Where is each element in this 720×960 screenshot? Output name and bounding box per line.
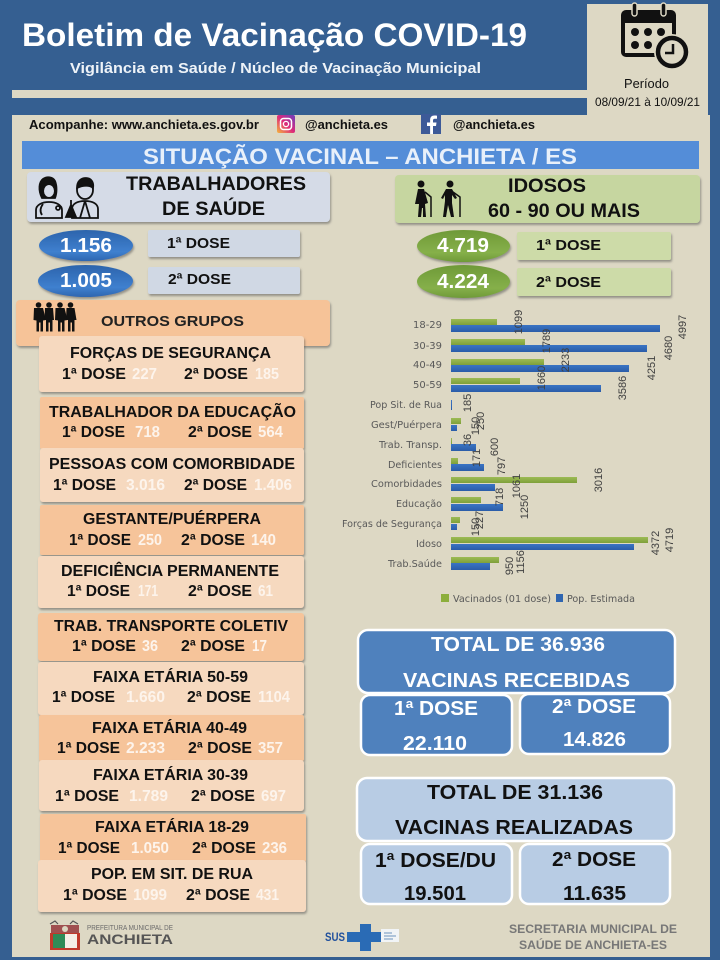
administered second dose: 2ª DOSE (552, 849, 636, 871)
data labels: 3586 (617, 376, 629, 400)
data labels: 1061 (511, 474, 523, 498)
card: comorbidade: PESSOAS COM COMORBIDADE (49, 456, 295, 473)
received second dose (520, 694, 670, 754)
data labels: 3016 (593, 468, 605, 492)
card: forças de segurança: 1ª DOSE (62, 366, 126, 383)
panel: vaccines received: TOTAL DE 36.936 (431, 634, 605, 656)
card: gestante: 140 (251, 532, 276, 549)
icon: instagram (277, 115, 295, 133)
footer: health department (509, 922, 677, 952)
card: comorbidade (40, 448, 304, 502)
data labels: 1156 (515, 550, 527, 574)
card: forças de segurança: 185 (255, 366, 279, 383)
administered first dose: 1ª DOSE/DU (375, 850, 496, 872)
card: comorbidade: 1ª DOSE (53, 477, 116, 494)
elderly second dose: 2ª DOSE (536, 274, 601, 291)
panel: vaccines administered (357, 778, 674, 905)
data labels: 4680 (663, 336, 675, 360)
data labels: 150 (470, 518, 482, 536)
card: gestante: 2ª DOSE (181, 532, 245, 549)
card: faixa 18-29 (40, 814, 306, 862)
data labels: 2233 (560, 348, 572, 372)
card: deficiência (38, 556, 304, 608)
card: deficiência: 2ª DOSE (188, 583, 252, 600)
period dates: 08/09/21 à 10/09/21 (595, 95, 700, 109)
data labels: 1099 (513, 310, 525, 334)
section heading bar: SITUAÇÃO VACINAL – ANCHIETA / ES (143, 144, 577, 169)
data labels: 600 (489, 438, 501, 456)
card: forças de segurança: 227 (132, 366, 157, 383)
card: deficiência: 61 (258, 583, 273, 600)
follow line (29, 114, 535, 134)
elderly first dose (417, 230, 671, 262)
logo: prefeitura de anchieta: ANCHIETA (87, 931, 173, 947)
category labels: Idoso (416, 539, 442, 550)
card: trabalhador da educação: 1ª DOSE (62, 424, 125, 441)
card: população em situação de rua: 431 (256, 887, 279, 904)
period label: Período (624, 76, 669, 91)
health workers second dose: 2ª DOSE (168, 271, 231, 288)
icon: elderly people (415, 180, 460, 217)
administered first dose: 19.501 (404, 883, 466, 905)
logo: SUS (325, 924, 399, 951)
data labels: 797 (496, 457, 508, 475)
received second dose: 14.826 (563, 729, 626, 751)
category labels: Comorbidades (371, 479, 442, 490)
panel: vaccines administered: VACINAS REALIZADAS (395, 817, 633, 839)
category labels: Pop Sit. de Rua (370, 400, 442, 411)
card: deficiência: 171 (138, 583, 158, 600)
panel: vaccines received: VACINAS RECEBIDAS (403, 670, 630, 692)
follow line: Acompanhe: www.anchieta.es.gov.br (29, 117, 259, 132)
title: Boletim de Vacinação COVID-19 (22, 17, 527, 53)
legend (441, 594, 635, 605)
bar chart: vaccinated vs estimated population (342, 310, 689, 605)
card: transporte coletivo (38, 613, 304, 661)
card: faixa 40-49: 357 (258, 740, 283, 757)
icon: group of people (34, 302, 76, 332)
category labels (342, 320, 442, 570)
card: comorbidade: 1.406 (254, 477, 292, 494)
follow line: @anchieta.es (453, 117, 535, 132)
panel: other groups (16, 300, 330, 346)
card: forças de segurança: FORÇAS DE SEGURANÇA (70, 345, 271, 362)
panel: vaccines administered: TOTAL DE 31.136 (427, 782, 603, 804)
card: faixa 50-59: 1104 (258, 689, 290, 706)
card: comorbidade: 2ª DOSE (184, 477, 247, 494)
card: população em situação de rua: 1099 (133, 887, 167, 904)
footer: health department: SECRETARIA MUNICIPAL DE (509, 922, 677, 936)
icon: facebook (421, 114, 441, 134)
card: população em situação de rua: 1ª DOSE (63, 887, 127, 904)
health workers first dose: 1ª DOSE (167, 235, 230, 252)
elderly first dose: 1ª DOSE (536, 237, 601, 254)
data labels: 1789 (541, 329, 553, 353)
health workers first dose: 1.156 (60, 235, 112, 257)
card: faixa 50-59: 1.660 (126, 689, 165, 706)
card: transporte coletivo: 1ª DOSE (72, 638, 136, 655)
card: faixa 50-59 (38, 662, 304, 715)
card: faixa 18-29: 2ª DOSE (192, 840, 256, 857)
legend: Pop. Estimada (567, 594, 635, 605)
card: trabalhador da educação: TRABALHADOR DA EDUCAÇÃO (49, 401, 296, 421)
health workers first dose (39, 230, 300, 261)
card: trabalhador da educação: 564 (258, 424, 283, 441)
health workers second dose: 1.005 (60, 270, 112, 292)
category labels: Deficientes (388, 460, 442, 471)
card: faixa 40-49: FAIXA ETÁRIA 40-49 (92, 718, 247, 737)
card: faixa 40-49 (39, 715, 304, 761)
card: forças de segurança: 2ª DOSE (184, 366, 248, 383)
health workers second dose (38, 265, 300, 297)
category labels: 18-29 (413, 320, 442, 331)
icon: calendar with clock (621, 3, 690, 70)
card: transporte coletivo: TRAB. TRANSPORTE COLETIV (54, 618, 288, 635)
card: faixa 40-49: 2ª DOSE (188, 740, 252, 757)
bars (451, 319, 660, 570)
header stripe (12, 90, 588, 98)
card: faixa 50-59: 1ª DOSE (52, 689, 115, 706)
data labels: 185 (462, 394, 474, 412)
data labels: 150 (470, 417, 482, 435)
card: transporte coletivo: 17 (252, 638, 267, 655)
section heading bar (22, 141, 699, 169)
card: faixa 30-39 (39, 760, 304, 811)
follow line: @anchieta.es (305, 117, 388, 132)
card: faixa 30-39: 697 (261, 788, 286, 805)
received first dose (361, 695, 512, 755)
card: gestante (40, 505, 304, 555)
card: trabalhador da educação (40, 397, 304, 449)
panel: elderly (395, 175, 700, 223)
card: deficiência: DEFICIÊNCIA PERMANENTE (61, 561, 279, 580)
category labels: 50-59 (413, 380, 442, 391)
category labels: Gest/Puérpera (371, 419, 442, 431)
heading: OUTROS GRUPOS (101, 313, 244, 330)
heading: IDOSOS (508, 176, 586, 197)
footer: health department: SAÚDE DE ANCHIETA-ES (519, 937, 667, 952)
data labels: 4997 (677, 315, 689, 339)
data labels: 250 (475, 412, 487, 430)
received second dose: 2ª DOSE (552, 696, 636, 718)
heading: TRABALHADORES (126, 174, 306, 195)
card: trabalhador da educação: 718 (135, 424, 160, 441)
card: faixa 30-39: 1.789 (129, 788, 168, 805)
card: trabalhador da educação: 2ª DOSE (188, 424, 252, 441)
data labels: 4719 (664, 528, 676, 552)
data labels: 227 (474, 511, 486, 529)
card: forças de segurança (39, 336, 304, 392)
card: faixa 18-29: FAIXA ETÁRIA 18-29 (95, 817, 249, 836)
received first dose: 1ª DOSE (394, 698, 478, 720)
card: faixa 18-29: 1.050 (131, 840, 169, 857)
category labels: Trab.Saúde (387, 558, 442, 570)
received first dose: 22.110 (403, 733, 467, 755)
card: população em situação de rua: POP. EM SIT. DE RUA (91, 866, 253, 883)
category labels: Educação (396, 499, 442, 510)
icon: doctors (36, 177, 98, 218)
card: deficiência: 1ª DOSE (67, 583, 130, 600)
card: faixa 30-39: 2ª DOSE (191, 788, 255, 805)
category labels: Trab. Transp. (378, 440, 442, 451)
card: faixa 50-59: 2ª DOSE (187, 689, 251, 706)
data labels: 718 (494, 488, 506, 506)
card: faixa 30-39: FAIXA ETÁRIA 30-39 (93, 765, 248, 784)
administered second dose: 11.635 (563, 883, 626, 905)
data labels: 171 (471, 449, 483, 467)
panel: health workers (27, 172, 330, 222)
data labels: 4251 (646, 356, 658, 380)
administered second dose (520, 844, 670, 905)
logo: SUS: SUS (325, 930, 345, 944)
icon: crest (50, 921, 80, 950)
data labels: 4372 (650, 531, 662, 555)
panel: vaccines received (358, 630, 675, 755)
data labels: 36 (462, 434, 474, 446)
data labels (462, 310, 689, 575)
card: gestante: GESTANTE/PUÉRPERA (83, 509, 261, 528)
subtitle: Vigilância em Saúde / Núcleo de Vacinação Municipal (70, 60, 481, 77)
card: faixa 40-49: 1ª DOSE (57, 740, 120, 757)
administered first dose (361, 844, 512, 905)
card: faixa 30-39: 1ª DOSE (55, 788, 119, 805)
elderly second dose: 4.224 (437, 271, 490, 293)
elderly second dose (417, 265, 671, 298)
card: faixa 40-49: 2.233 (126, 740, 165, 757)
card: faixa 18-29: 1ª DOSE (58, 840, 120, 857)
logo: prefeitura de anchieta (50, 921, 173, 950)
category labels: 40-49 (413, 360, 442, 371)
panel: health workers: DE SAÚDE (162, 198, 265, 220)
card: faixa 18-29: 236 (262, 840, 287, 857)
category labels: 30-39 (413, 341, 442, 352)
card: transporte coletivo: 2ª DOSE (181, 638, 245, 655)
data labels: 950 (504, 557, 516, 575)
card: população em situação de rua: 2ª DOSE (186, 887, 250, 904)
category labels: Forças de Segurança (342, 519, 442, 530)
panel: elderly: 60 - 90 OU MAIS (488, 201, 640, 222)
card: gestante: 1ª DOSE (69, 532, 131, 549)
elderly first dose: 4.719 (437, 235, 489, 257)
data labels: 1660 (536, 366, 548, 390)
data labels: 1250 (519, 495, 531, 519)
card: gestante: 250 (138, 532, 162, 549)
card: faixa 50-59: FAIXA ETÁRIA 50-59 (93, 667, 248, 686)
card: transporte coletivo: 36 (142, 638, 158, 655)
legend: Vacinados (01 dose) (453, 594, 551, 605)
card: população em situação de rua (38, 860, 306, 912)
logo: prefeitura de anchieta: PREFEITURA MUNICIPAL DE (87, 925, 173, 932)
panel: period (587, 3, 708, 116)
card: comorbidade: 3.016 (126, 477, 165, 494)
